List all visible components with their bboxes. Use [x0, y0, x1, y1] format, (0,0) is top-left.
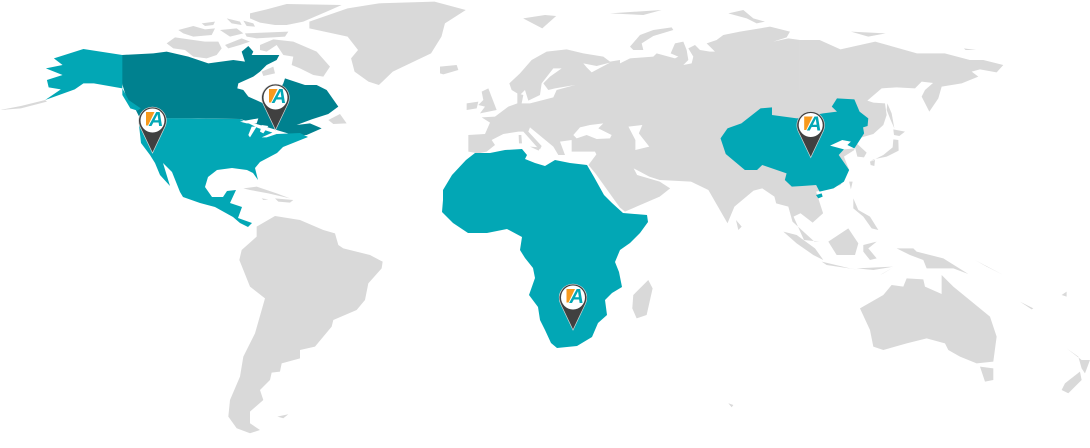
south america, madagascar: [228, 216, 653, 433]
pin: eastern canada: [262, 84, 289, 130]
pin: western united states: [139, 107, 166, 153]
pin: china: A: [806, 114, 822, 136]
north america: alaska: [45, 49, 141, 111]
pin: eastern canada: A: [271, 86, 286, 108]
pin: southern africa: A: [568, 286, 584, 308]
greenland, svalbard, aleutians: [0, 2, 556, 110]
great lakes: [240, 118, 277, 137]
asia: [588, 32, 976, 242]
pin: china: [797, 112, 824, 158]
caribbean: [243, 187, 293, 203]
oceania and southeast asia: [728, 198, 1090, 407]
russian far east, korea, japan: [840, 60, 1003, 166]
pin: western united states: A: [148, 109, 163, 131]
africa: [442, 149, 648, 348]
north america: united states, mexico, central america: [139, 118, 308, 227]
atlantic canada: [328, 114, 347, 124]
pin: southern africa: [559, 284, 587, 330]
inland seas: [573, 63, 854, 155]
china: [721, 98, 868, 198]
canadian arctic islands: [167, 4, 342, 77]
north america: canada: [122, 46, 338, 135]
northern russia: [600, 10, 800, 90]
europe: [440, 49, 620, 165]
